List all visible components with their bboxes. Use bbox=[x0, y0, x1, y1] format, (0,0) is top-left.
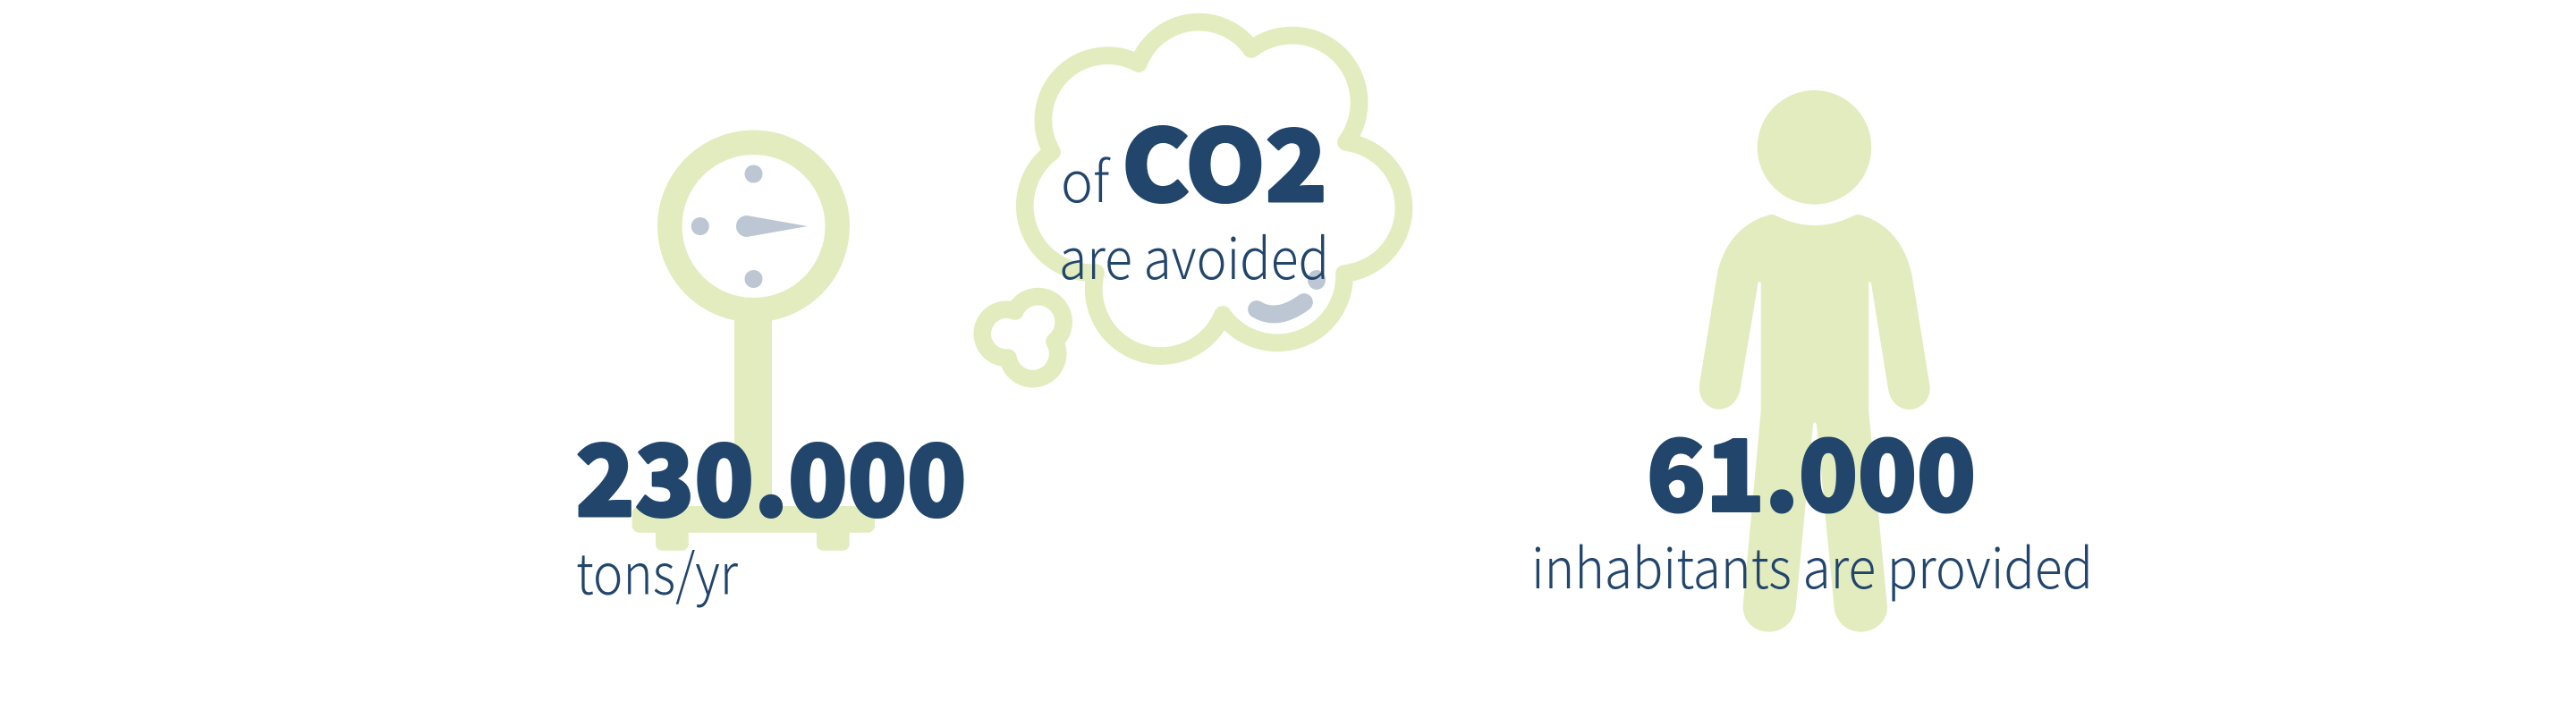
icon: scale bbox=[632, 142, 875, 551]
icon: person bbox=[1699, 90, 1930, 632]
label: are avoided: are avoided bbox=[1059, 215, 1329, 296]
label: tons/yr: tons/yr bbox=[576, 529, 738, 611]
panel: weight scale bbox=[576, 142, 966, 611]
icon: thought cloud bbox=[982, 22, 1403, 379]
stat: 61.000: 61.000 bbox=[1647, 397, 1976, 540]
heading: CO2: CO2 bbox=[1122, 87, 1327, 230]
panel: inhabitants bbox=[1531, 90, 2093, 632]
label: of: of bbox=[1061, 138, 1111, 219]
stat: 230.000: 230.000 bbox=[576, 401, 966, 545]
label: inhabitants are provided: inhabitants are provided bbox=[1531, 524, 2093, 604]
panel: CO2 thought cloud bbox=[982, 22, 1403, 379]
